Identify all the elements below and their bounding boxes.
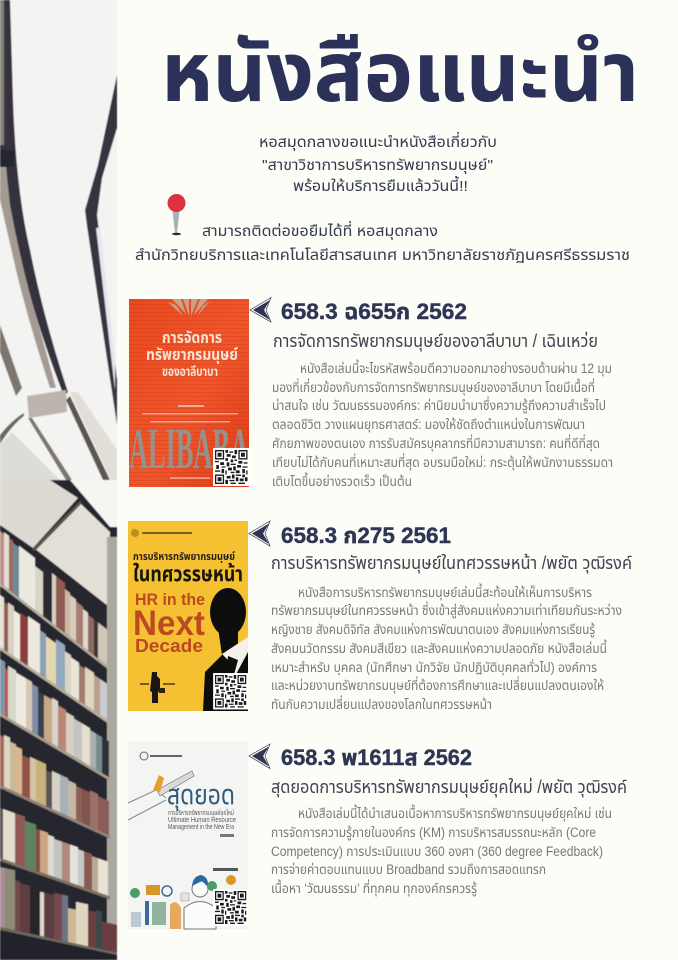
panel: book 2 xyxy=(128,521,632,712)
book cover: Alibaba: ของอาลีบาบา xyxy=(162,364,218,379)
book cover: Ultimate HR: การบริหารทรัพยากรมนุษย์ยุคใหม่ xyxy=(168,808,234,818)
call number: 658.3 ก275 2561 xyxy=(281,523,451,548)
panel: book 1: ALIBABA xyxy=(129,416,249,481)
icon: map pin xyxy=(168,194,186,235)
contact text block: สามารถติดต่อขอยืมได้ที่ หอสมุดกลาง xyxy=(202,220,438,240)
book cover: Alibaba: ทรัพยากรมนุษย์ xyxy=(146,347,238,364)
contact text block xyxy=(135,220,630,264)
book cover: HR in the Next Decade: ในทศวรรษหน้า xyxy=(133,563,243,586)
book cover: HR in the Next Decade: Decade xyxy=(135,636,203,656)
book cover: HR in the Next Decade: Next xyxy=(133,604,205,643)
panel: book 1 xyxy=(129,298,613,489)
book description: น่าสนใจ เช่น วัฒนธรรมองค์กร: ค่านิยมนำมาซึ่งความรู้ถึงความสำเร็จไป xyxy=(272,396,606,414)
photo: library bookshelves and skylight xyxy=(0,0,117,960)
intro text block: หอสมุดกลางขอแนะนำหนังสือเกี่ยวกับ xyxy=(259,131,497,151)
book cover: HR in the Next Decade: การบริหารทรัพยากรมนุษย์ xyxy=(133,551,235,563)
book description: สังคมนวัตกรรม สังคมสีเขียว และสังคมแห่งความปลอดภัย หนังสือเล่มนี้ xyxy=(271,639,607,656)
book description: เติบโตขึ้นอย่างรวดเร็ว เป็นต้น xyxy=(272,472,412,489)
book description: ทรัพยากรมนุษย์ในทศวรรษหน้า ซึ่งเข้าสู่สังคมแห่งความเท่าเทียมกันระหว่าง xyxy=(271,601,622,619)
(lower photo) xyxy=(0,480,117,960)
book description: หนังสือเล่มนี้จะไขรหัสพร้อมตีความออกมาอย่างรอบด้านผ่าน 12 มุม xyxy=(300,359,612,377)
arrow marker xyxy=(249,744,270,768)
book description: Competency) การประเมินแบบ 360 องศา (360 degree Feedback) xyxy=(271,844,603,859)
QR code xyxy=(213,889,248,926)
panel: book 3 xyxy=(128,741,627,929)
book title: สุดยอดการบริหารทรัพยากรมนุษย์ยุคใหม่ /พยัต วุฒิรงค์ xyxy=(271,777,627,798)
book title: การบริหารทรัพยากรมนุษย์ในทศวรรษหน้า /พยัต วุฒิรงค์ xyxy=(271,553,632,574)
book description: หนังสือเล่มนี้ได้นำเสนอเนื้อหาการบริหารทรัพยากรมนุษย์ยุคใหม่ เช่น xyxy=(298,804,612,822)
intro text block xyxy=(259,131,497,195)
arrow marker xyxy=(249,521,270,546)
book title: การจัดการทรัพยากรมนุษย์ของอาลีบาบา / เฉินเหว่ย xyxy=(273,331,598,352)
contact text block: สำนักวิทยบริการและเทคโนโลยีสารสนเทศ มหาวิทยาลัยราชภัฏนครศรีธรรมราช xyxy=(135,247,630,264)
book description: เทียบไม่ได้กับคนที่เหมาะสมที่สุด อบรมมือใหม่: กระตุ้นให้พนักงานธรรมดา xyxy=(272,453,613,471)
main title: หนังสือแนะนำ xyxy=(161,25,639,119)
call number: 658.3 ฉ655ก 2562 xyxy=(281,299,467,324)
intro text block: "สาขาวิชาการบริหารทรัพยากรมนุษย์" xyxy=(262,157,493,174)
book description: การจ่ายค่าตอบแทนแบบ Broadband รวมถึงการสอดแทรก xyxy=(271,861,546,877)
book description: ศักยภาพของตนเอง การรับสมัครบุคลากรที่มีความสามารถ: คนที่ดีที่สุด xyxy=(272,434,600,452)
book cover: Alibaba xyxy=(129,299,249,487)
book description: เนื้อหา ‘วัฒนธรรม’ ที่ทุกคน ทุกองค์กรควรรู้ xyxy=(271,879,478,897)
book description: ตลอดชีวิต วางแผนยุทธศาสตร์: มองให้ชัดถึงตำแหน่งในการพัฒนา xyxy=(272,416,585,433)
book cover: Ultimate HR xyxy=(128,741,248,929)
arrow marker xyxy=(250,298,271,322)
book cover: Ultimate HR: Ultimate Human Resource xyxy=(168,815,236,824)
book description: มองที่เกี่ยวข้องกับการจัดการทรัพยากรมนุษย์ของอาลีบาบา โดยมีเนื้อที่ xyxy=(272,378,595,396)
QR code xyxy=(213,448,249,486)
QR code xyxy=(213,673,248,709)
book description: หญิงชาย สังคมดิจิทัล สังคมแห่งการพัฒนาตนเอง สังคมแห่งการเรียนรู้ xyxy=(271,621,596,638)
book cover: HR in the Next Decade xyxy=(128,521,248,711)
book cover: Ultimate HR: Management in the New Era xyxy=(168,822,235,831)
book cover: Ultimate HR: สุดยอด xyxy=(167,779,235,811)
book description: และหน่วยงานทรัพยากรมนุษย์ที่ต้องการศึกษาและเปลี่ยนแปลงตนเองให้ xyxy=(271,676,604,694)
book description: ทันกับความเปลี่ยนแปลงของโลกในทศวรรษหน้า xyxy=(271,695,492,712)
call number: 658.3 พ1611ส 2562 xyxy=(281,745,472,770)
book cover: HR in the Next Decade: HR in the xyxy=(135,590,205,609)
book description: หนังสือการบริหารทรัพยากรมนุษย์เล่มนี้สะท้อนให้เห็นการบริหาร xyxy=(298,583,592,601)
book description xyxy=(271,583,622,712)
book cover: Alibaba: การจัดการ xyxy=(162,330,222,347)
book description xyxy=(271,804,612,897)
intro text block: พร้อมให้บริการยืมแล้ววันนี้!! xyxy=(293,175,468,195)
book description: การจัดการความรู้ภายในองค์กร (KM) การบริหารสมรรถนะหลัก (Core xyxy=(271,825,596,841)
book description: เหมาะสำหรับ บุคคล (นักศึกษา นักวิจัย นักปฏิบัติบุคคลทั่วไป) องค์การ xyxy=(271,659,597,676)
book description xyxy=(272,359,613,489)
